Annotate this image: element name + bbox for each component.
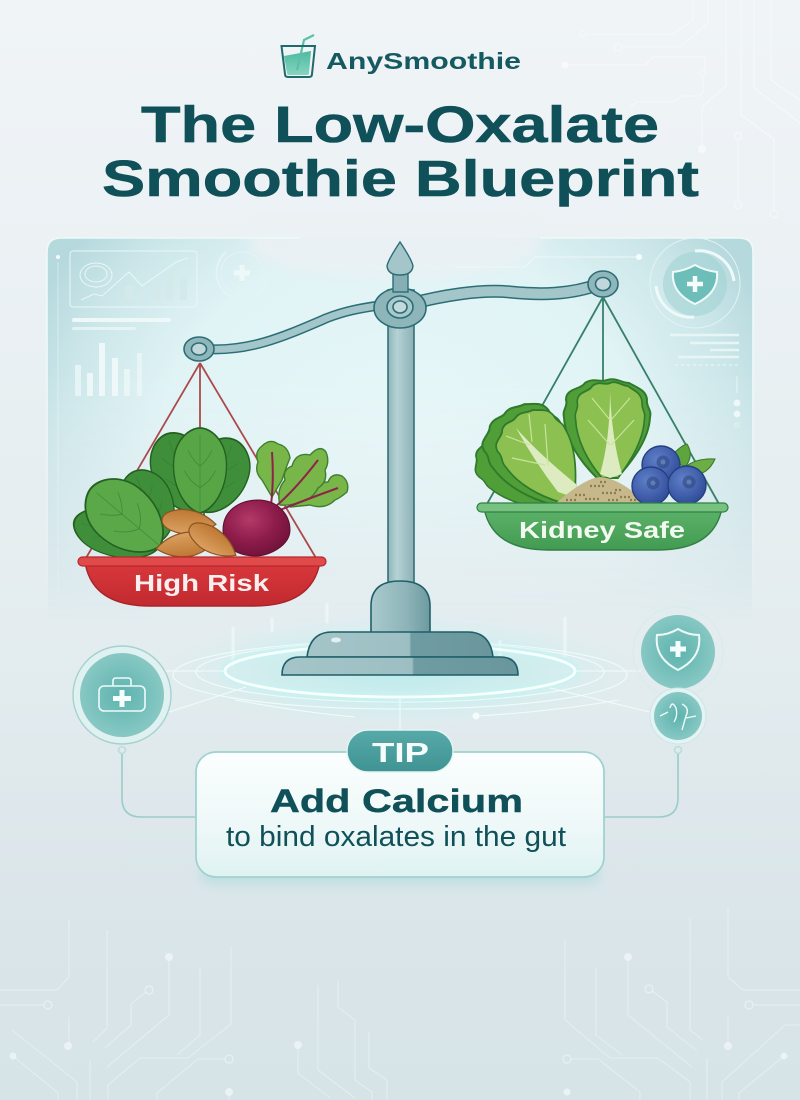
tip heading: Add Calcium [270,783,523,819]
icon: ring with plus [216,252,268,298]
label: High Risk: High Risk [134,570,269,596]
title: Smoothie Blueprint [102,150,699,207]
icon: shield right [633,607,723,697]
tip badge: TIP [372,737,429,768]
center hub [374,288,426,328]
circuit pattern: top right [562,0,800,218]
icon: kidney nodes [650,688,706,744]
left pan group [67,363,348,606]
icon: medical kit [73,646,171,744]
panel details: left chart box [56,251,197,307]
beet greens [257,441,348,510]
strings right [487,297,719,504]
circuit pattern: bottom [0,907,800,1100]
grain pile [556,477,646,503]
brand logo [282,35,521,77]
romaine right [564,379,650,478]
left pivot [184,337,214,361]
finial [387,242,413,292]
panel: dashboard backdrop [46,238,754,586]
scale beam right [410,284,600,304]
panel details: right [455,238,740,428]
right pivot [588,271,618,297]
tip card [196,730,604,883]
almonds [155,508,242,566]
connector left [118,746,196,817]
spinach center [141,425,260,522]
title: The Low-Oxalate [141,96,659,153]
title [102,96,699,207]
red pan [78,557,326,606]
tip body: to bind oxalates in the gut [226,821,566,853]
floor glow and rings [153,603,654,732]
icon: smoothie cup [282,35,315,77]
balance scale [184,242,618,675]
icon: shield ring [650,238,740,328]
blueberries [632,444,715,505]
brand name: AnySmoothie [326,48,521,74]
beet [223,500,290,556]
connector right [604,746,682,817]
panel details: left lines and bars [72,318,171,396]
strings left [86,363,316,558]
green pan [477,503,728,550]
scale beam left [205,304,390,349]
label: Kidney Safe: Kidney Safe [519,517,685,543]
romaine left [463,390,598,527]
scale base [282,581,518,675]
right pan group [463,297,728,550]
spinach left [67,462,186,570]
tip badge [347,730,453,772]
scale post [388,290,414,590]
